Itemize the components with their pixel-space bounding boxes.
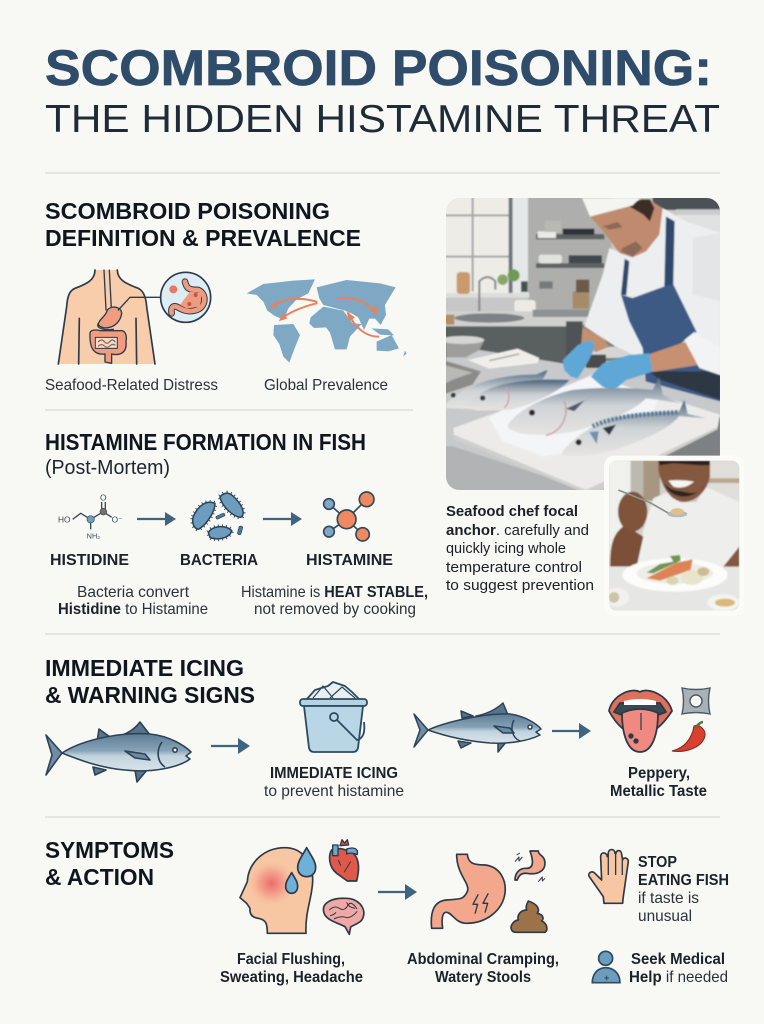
photo caption: to suggest prevention xyxy=(446,577,594,594)
apron xyxy=(621,283,721,401)
icon: histidine molecule: HO xyxy=(58,514,71,524)
jacket xyxy=(584,207,720,356)
text: stop eating fish xyxy=(638,854,729,925)
text: abdominal cramping: Abdominal Cramping, xyxy=(407,951,559,968)
text: abdominal cramping: Watery Stools xyxy=(435,969,531,986)
text: peppery metallic taste: Metallic Taste xyxy=(610,783,707,800)
icon: chili pepper xyxy=(672,722,705,751)
text: immediate icing: IMMEDIATE ICING xyxy=(270,765,398,782)
text: bacteria convert histidine xyxy=(58,584,208,618)
icon: tongue and lips xyxy=(609,691,672,752)
icon: cramping stomach xyxy=(431,851,547,932)
icon: medical help person xyxy=(592,951,620,983)
labels: formation steps: HISTIDINE xyxy=(50,552,129,569)
text: stop eating fish: if taste is xyxy=(638,890,699,907)
text: seek medical help: Seek Medical xyxy=(631,951,725,968)
text: immediate icing xyxy=(264,765,404,800)
heading: histamine formation xyxy=(45,429,366,479)
gloves xyxy=(563,340,595,378)
text: histamine heat stable xyxy=(241,584,428,618)
heading: definition and prevalence xyxy=(45,198,361,251)
text: seek medical help xyxy=(629,951,728,986)
icon: metallic square xyxy=(682,688,710,714)
text: facial flushing: Sweating, Headache xyxy=(220,969,363,986)
text: bacteria convert histidine: Bacteria convert xyxy=(77,584,190,601)
photo caption: quickly icing whole xyxy=(446,540,566,557)
front-centre fish xyxy=(508,377,681,435)
text: histamine heat stable: Histamine is HEAT STABLE, xyxy=(241,584,428,601)
text: peppery metallic taste: Peppery, xyxy=(628,765,690,782)
text: seek medical help: Help if needed xyxy=(629,969,728,986)
arrow: histidine to bacteria xyxy=(137,512,176,526)
text: stop eating fish: EATING FISH xyxy=(638,872,729,889)
arm left xyxy=(581,327,609,352)
text: immediate icing: to prevent histamine xyxy=(264,783,404,800)
icon: histidine molecule: NH₂ xyxy=(87,532,100,541)
photo: chef icing whole fish xyxy=(441,195,726,498)
caption: global prevalence: Global Prevalence xyxy=(264,377,388,394)
heading: symptoms and action xyxy=(45,837,174,890)
labels: formation steps: BACTERIA xyxy=(180,552,258,569)
labels: formation steps xyxy=(50,552,393,569)
title: SCOMBROID POISONING: xyxy=(45,40,712,96)
photo caption: Seafood chef focal xyxy=(446,503,578,520)
photo: man eating seafood xyxy=(604,456,744,616)
text: peppery metallic taste xyxy=(610,765,707,800)
photo caption: temperature control xyxy=(446,559,582,576)
arrow: bacteria to histamine xyxy=(263,512,302,526)
labels: formation steps: HISTAMINE xyxy=(306,552,393,569)
cutting board xyxy=(453,397,720,490)
text: bacteria convert histidine: Histidine to Histamine xyxy=(58,601,208,618)
icon: bacteria xyxy=(193,493,243,539)
text: stop eating fish: unusual xyxy=(638,908,692,925)
text: histamine heat stable: not removed by cooking xyxy=(254,601,416,618)
heading: definition and prevalence: DEFINITION & PREVALENCE xyxy=(45,225,361,251)
heading: symptoms and action: & ACTION xyxy=(45,864,154,890)
heading: immediate icing xyxy=(45,655,255,708)
icon: ice bucket xyxy=(300,682,367,752)
icon: histidine molecule: O xyxy=(100,493,107,503)
text: facial flushing xyxy=(220,951,363,986)
dark cabinet behind hands xyxy=(649,371,721,400)
icon: whole fish xyxy=(46,722,191,782)
photo caption: anchor. carefully and xyxy=(446,522,589,539)
arrow: head to stomach xyxy=(378,884,417,900)
title: THE HIDDEN HISTAMINE THREAT xyxy=(45,98,720,141)
arrow: whole fish to bucket xyxy=(211,738,250,754)
photo caption xyxy=(446,503,594,594)
rear fish xyxy=(446,370,548,410)
title xyxy=(45,40,720,141)
counter xyxy=(446,349,564,368)
icon: body with stomach distress xyxy=(58,270,211,364)
text: facial flushing: Facial Flushing, xyxy=(237,951,345,968)
icon: world map with spread arrows xyxy=(247,279,407,363)
icon: stop hand xyxy=(589,850,628,903)
heading: immediate icing: & WARNING SIGNS xyxy=(45,682,255,708)
heading: histamine formation: HISTAMINE FORMATION IN FISH xyxy=(45,429,366,455)
icon: flushed head with sweat xyxy=(240,840,364,934)
icon: histidine molecule: O⁻ xyxy=(112,514,123,524)
icon: histamine molecule xyxy=(324,492,374,541)
text: abdominal cramping xyxy=(407,951,559,986)
arm right xyxy=(646,342,701,372)
icon: histidine molecule xyxy=(58,493,123,541)
front-right mackerel xyxy=(562,400,706,456)
heading: definition and prevalence: SCOMBROID POISONING xyxy=(45,198,330,224)
icon: iced fish xyxy=(414,703,541,752)
caption: seafood-related distress: Seafood-Related Distress xyxy=(45,377,218,394)
ice xyxy=(489,375,659,456)
arrow: fish to taste xyxy=(552,723,591,739)
back wall xyxy=(446,198,720,446)
heading: symptoms and action: SYMPTOMS xyxy=(45,837,174,863)
heading: immediate icing: IMMEDIATE ICING xyxy=(45,655,244,681)
face xyxy=(589,200,663,257)
heading: histamine formation: (Post-Mortem) xyxy=(45,457,170,479)
bowl, napkin, tray xyxy=(446,340,484,357)
text: stop eating fish: STOP xyxy=(638,854,677,871)
